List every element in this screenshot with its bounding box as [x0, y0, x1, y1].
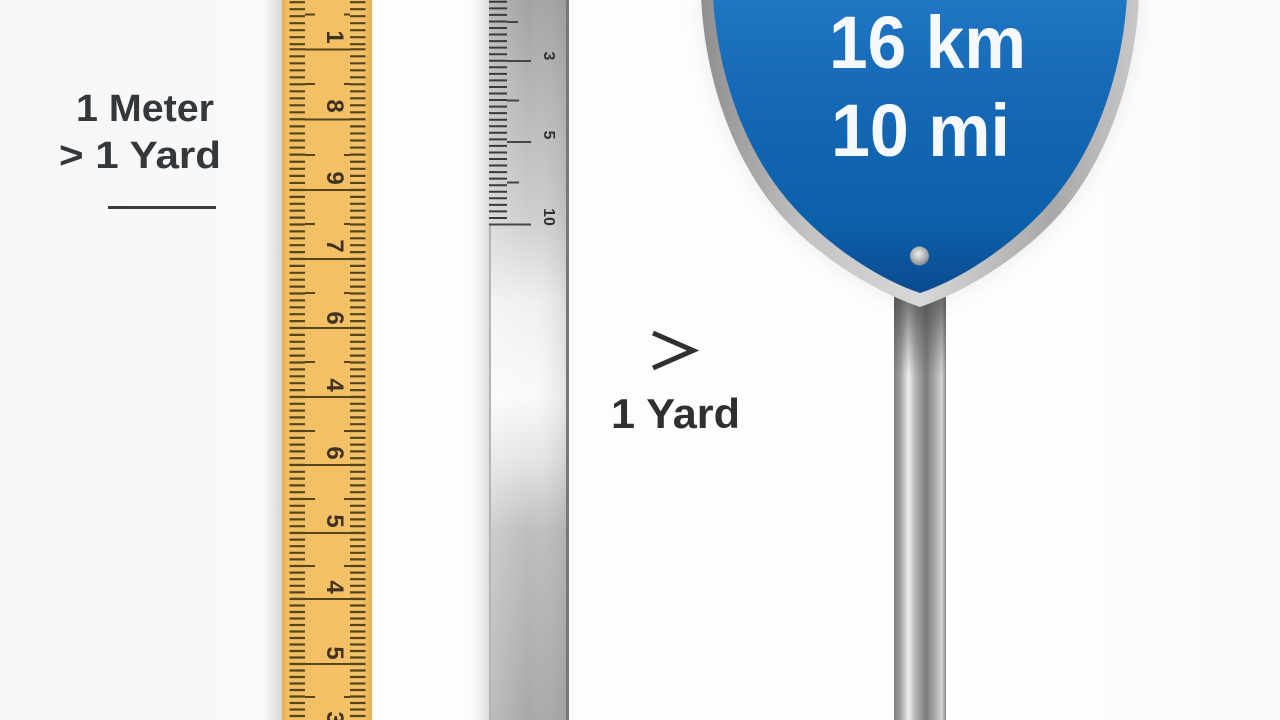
sign text: 16 km: 16 km — [829, 1, 1026, 84]
label: 1 Yard: 1 Yard — [611, 390, 740, 437]
ruler numerals: 5 — [540, 131, 557, 140]
tape numerals: 7 — [321, 239, 348, 253]
shield face — [713, 0, 1127, 293]
rivet — [910, 246, 929, 266]
ruler minor ticks — [489, 1, 507, 226]
ruler major and mid ticks — [489, 22, 531, 224]
shield shadow — [701, 0, 1139, 307]
steel ruler — [470, 0, 569, 720]
tape right minor ticks — [358, 0, 360, 720]
tape numerals: 1 — [321, 30, 348, 44]
text: 1 Meter > 1 Yard — [59, 88, 221, 177]
ruler numerals — [540, 52, 557, 226]
tape numerals: 9 — [321, 171, 348, 185]
tape left minor ticks — [295, 0, 297, 720]
tape numerals — [321, 30, 348, 720]
text line: 1 Meter: 1 Meter — [76, 88, 214, 130]
sign text — [829, 1, 1026, 172]
sign text: 10 mi: 10 mi — [831, 89, 1010, 172]
ruler numerals: 3 — [540, 52, 557, 61]
tape numerals: 4 — [321, 580, 348, 594]
shield rim — [701, 0, 1139, 307]
measuring tape — [262, 0, 372, 720]
tape numerals: 4 — [321, 378, 348, 392]
sign pole — [894, 296, 946, 720]
underline — [108, 206, 216, 209]
tape major and mid ticks — [305, 14, 350, 697]
ruler numerals: 10 — [540, 208, 557, 226]
tape numerals: 6 — [321, 446, 348, 460]
tape numerals: 5 — [321, 514, 348, 528]
text line: > 1 Yard: > 1 Yard — [59, 135, 221, 177]
greater-than sign — [653, 333, 693, 368]
road sign — [701, 0, 1139, 720]
tape numerals: 8 — [321, 99, 348, 113]
tape numerals: 5 — [321, 646, 348, 660]
tape numerals: 6 — [321, 311, 348, 325]
